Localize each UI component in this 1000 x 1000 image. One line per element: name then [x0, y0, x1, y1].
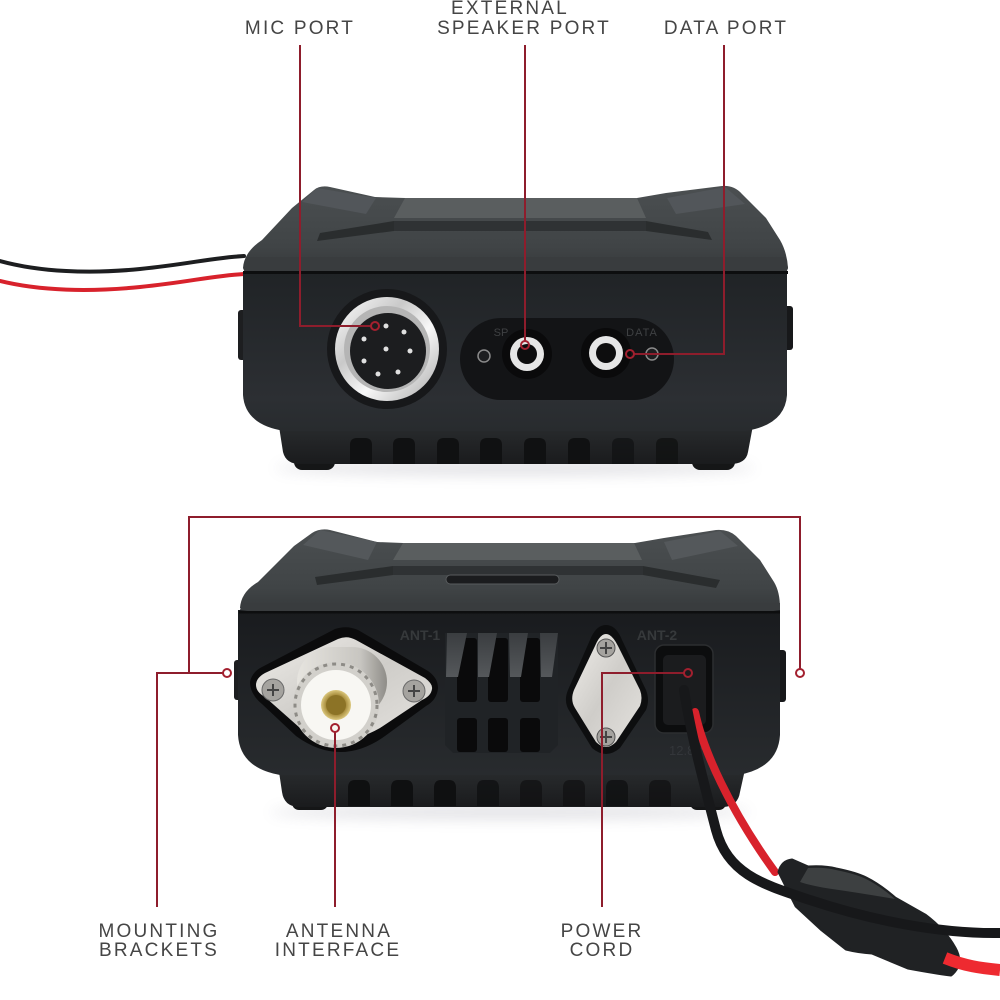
mounting brackets bracket: [189, 517, 800, 673]
label: power cord: [561, 921, 643, 961]
feet: [294, 452, 735, 470]
main body: [238, 610, 780, 775]
red wire: [695, 712, 775, 872]
speaker grille: [446, 575, 559, 584]
main body: [243, 272, 787, 431]
data port callout: [634, 45, 724, 354]
lid: [240, 529, 780, 613]
label: mounting brackets: MOUNTING: [98, 921, 220, 942]
ground shadows: [270, 461, 755, 819]
lid: [243, 186, 788, 273]
side bumps: [234, 660, 244, 700]
ANT-1 label: ANT-1: [400, 627, 440, 643]
label: antenna interface: INTERFACE: [275, 940, 401, 961]
wires: top device cable: [0, 256, 244, 290]
label: antenna interface: ANTENNA: [286, 921, 392, 942]
ventilation slots: [445, 633, 558, 753]
power cord callout: [602, 673, 684, 907]
power socket: [655, 645, 713, 758]
speaker and data port panel: [460, 318, 674, 400]
fuse holder: [779, 860, 959, 975]
black wire: [684, 690, 1000, 933]
ANT-2 plate: ANT-2: [637, 627, 677, 643]
power socket: 12.8V: [669, 743, 703, 758]
speaker port callout: [524, 45, 526, 341]
antenna connector: [250, 627, 438, 752]
label: mounting brackets: BRACKETS: [99, 940, 219, 961]
power cable: [684, 690, 1000, 975]
label: antenna interface: [275, 921, 401, 961]
callout markers: [223, 322, 804, 732]
ANT-2 plate: [566, 625, 677, 754]
mounting bracket left leader: [157, 673, 223, 907]
base with vents: [278, 420, 754, 464]
bottom device: front connector view of radio: [234, 529, 786, 810]
label: mic port: MIC PORT: [245, 18, 355, 39]
lid recess: [393, 543, 642, 560]
label: mounting brackets: [98, 921, 220, 961]
feet: [292, 795, 726, 810]
callout lines: [157, 45, 800, 907]
base with vents: [278, 765, 746, 807]
label: external speaker port: SPEAKER PORT: [437, 18, 611, 39]
side bumps: [238, 310, 248, 360]
top device: rear view of radio: [238, 186, 793, 470]
speaker and data port panel: SP: [494, 327, 508, 339]
label: power cord: POWER: [561, 921, 643, 942]
antenna callout: [334, 732, 336, 907]
label: external speaker port: [437, 0, 611, 39]
label: power cord: CORD: [570, 940, 634, 961]
lid recess: [394, 198, 646, 218]
mic port: [327, 289, 447, 409]
label: data port: DATA PORT: [664, 18, 788, 39]
red wire exit: [945, 958, 1000, 970]
speaker and data port panel: DATA: [626, 327, 658, 339]
mic port callout: [300, 45, 371, 326]
